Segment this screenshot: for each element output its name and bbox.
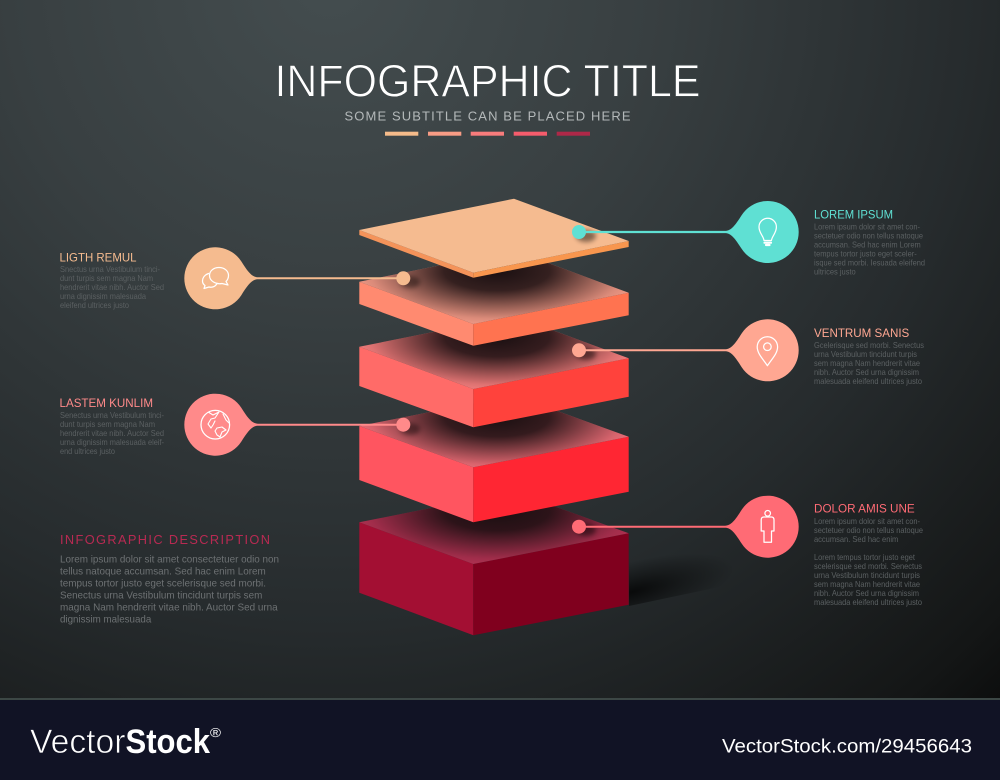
text block: infographic description: dignissim malesuada bbox=[60, 614, 152, 626]
subtitle: SOME SUBTITLE CAN BE PLACED HERE bbox=[344, 108, 631, 124]
callout pin: lorem ipsum bbox=[572, 201, 799, 263]
text block: ventrum sanis bbox=[814, 326, 924, 386]
text block: lorem ipsum bbox=[814, 208, 925, 276]
callout pin: dolor amis une bbox=[572, 496, 799, 558]
text block: infographic description: tempus tortor justo eget scelerisque sed morbi. bbox=[60, 578, 266, 590]
callout pin: ventrum sanis bbox=[572, 319, 799, 381]
text block: infographic description: magna Nam hendrerit vitae nibh. Auctor Sed urna bbox=[60, 602, 278, 614]
text block: lastem kunlim: end ultrices justo bbox=[60, 446, 115, 456]
text block: lastem kunlim: hendrerit vitae nibh. Auctor Sed bbox=[60, 428, 164, 438]
stacked layer 3 bbox=[359, 320, 629, 428]
text block: ventrum sanis: nibh. Auctor Sed urna dignissim bbox=[814, 367, 919, 377]
colour key bars bbox=[385, 132, 590, 136]
text block: lastem kunlim: dunt turpis sem magna Nam bbox=[60, 419, 155, 429]
text block: ligth remul: urna dignissim malesuada bbox=[60, 291, 146, 301]
text block: ventrum sanis: Gcelerisque sed morbi. Senectus bbox=[814, 340, 924, 350]
footer logo: Stock bbox=[126, 723, 210, 761]
footer logo: Vector bbox=[30, 723, 126, 761]
text block: ventrum sanis: sem magna Nam hendrerit vitae bbox=[814, 358, 920, 368]
text block: lorem ipsum: sectetuer odio non tellus natoque bbox=[814, 230, 923, 240]
text block: lastem kunlim: LASTEM KUNLIM bbox=[60, 396, 153, 410]
text block: lastem kunlim: urna dignissim malesuada eleif- bbox=[60, 437, 164, 447]
text block: ligth remul: hendrerit vitae nibh. Auctor Sed bbox=[60, 282, 164, 292]
text block: ligth remul: LIGTH REMUL bbox=[60, 250, 137, 264]
text block: lorem ipsum: tempus tortor justo eget sceler- bbox=[814, 248, 917, 258]
text block: lastem kunlim bbox=[60, 396, 164, 456]
text block: lorem ipsum: Lorem ipsum dolor sit amet con- bbox=[814, 222, 920, 232]
icon: speech bubbles bbox=[202, 268, 228, 288]
text block: dolor amis une: nibh. Auctor Sed urna dignissim bbox=[814, 588, 919, 598]
text block: dolor amis une: urna Vestibulum tincidunt turpis bbox=[814, 570, 920, 580]
stacked layer 5: base block bbox=[359, 506, 629, 636]
text block: ligth remul: Snectus urna Vestibulum tinci- bbox=[60, 264, 160, 274]
text block: infographic description bbox=[60, 532, 279, 626]
text block: infographic description: INFOGRAPHIC DESCRIPTION bbox=[60, 532, 270, 547]
footer logo bbox=[30, 723, 221, 761]
text block: lorem ipsum: ultrices justo bbox=[814, 266, 856, 276]
text block: dolor amis une: sectetuer odio non tellus natoque bbox=[814, 525, 923, 535]
text block: dolor amis une: accumsan. Sed hac enim bbox=[814, 534, 898, 544]
footer logo: ® bbox=[210, 725, 221, 740]
text block: lorem ipsum: accumsan. Sed hac enim Lorem bbox=[814, 240, 921, 250]
text block: lorem ipsum: isque sed morbi. Iesuada eleifend bbox=[814, 258, 925, 268]
stacked layer 4 bbox=[359, 410, 629, 522]
text block: dolor amis une bbox=[814, 502, 923, 607]
stacked layer 2 bbox=[359, 260, 629, 346]
text block: infographic description: Senectus urna Vestibulum tincidunt turpis sem bbox=[60, 590, 262, 602]
text block: ligth remul: eleifend ultrices justo bbox=[60, 300, 129, 310]
text block: dolor amis une: DOLOR AMIS UNE bbox=[814, 502, 915, 516]
text block: dolor amis une: scelerisque sed morbi. Senectus bbox=[814, 561, 922, 571]
text block: dolor amis une: sem magna Nam hendrerit vitae bbox=[814, 579, 920, 589]
icon: light bulb bbox=[759, 218, 776, 245]
text block: infographic description: tellus natoque accumsan. Sed hac enim Lorem bbox=[60, 566, 266, 578]
text block: ventrum sanis: urna Vestibulum tincidunt turpis bbox=[814, 349, 917, 359]
text block: ligth remul: dunt turpis sem magna Nam bbox=[60, 273, 153, 283]
text block: lorem ipsum: LOREM IPSUM bbox=[814, 208, 893, 222]
icon: person bbox=[761, 510, 774, 542]
text block: dolor amis une: malesuada eleifend ultrices justo bbox=[814, 597, 922, 607]
icon: globe bbox=[201, 410, 230, 439]
floor shadow bbox=[629, 564, 703, 606]
callout pin: ligth remul bbox=[184, 247, 420, 309]
stacked layer 1: top plate bbox=[359, 199, 629, 278]
footer image id: VectorStock.com/29456643 bbox=[722, 737, 972, 758]
icon: map pin bbox=[757, 337, 778, 366]
callout pin: lastem kunlim bbox=[184, 394, 420, 456]
text block: ligth remul bbox=[60, 250, 164, 310]
text block: dolor amis une: Lorem ipsum dolor sit amet con- bbox=[814, 516, 920, 526]
text block: ventrum sanis: VENTRUM SANIS bbox=[814, 326, 909, 340]
text block: ventrum sanis: malesuada eleifend ultrices justo bbox=[814, 376, 922, 386]
text block: lastem kunlim: Senectus urna Vestibulum tinci- bbox=[60, 410, 164, 420]
footer banner bbox=[0, 698, 1000, 780]
text block: infographic description: Lorem ipsum dolor sit amet consectetuer odio non bbox=[60, 554, 279, 566]
title: INFOGRAPHIC TITLE bbox=[274, 56, 700, 106]
text block: dolor amis une: Lorem tempus tortor justo eget bbox=[814, 552, 916, 562]
